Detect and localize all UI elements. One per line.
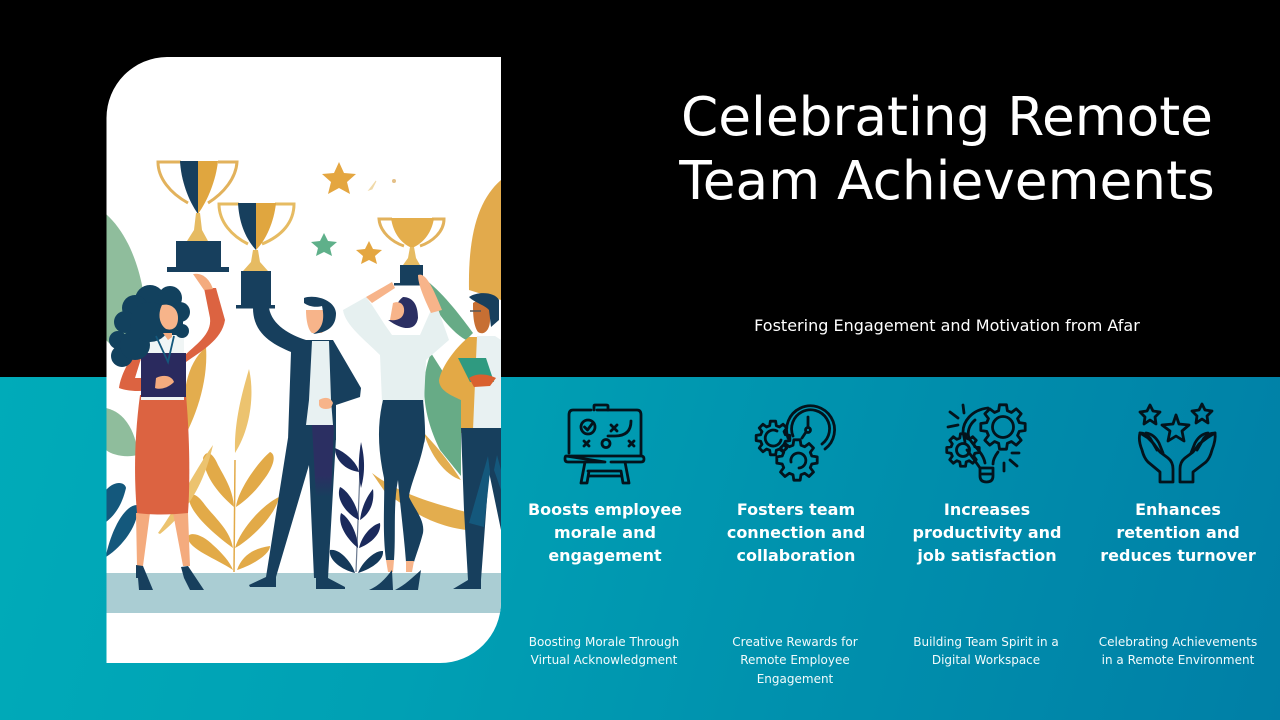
heading: team connection: collaboration bbox=[737, 546, 855, 565]
icon: bulb with gears bbox=[945, 403, 1027, 484]
description: team spirit: Building Team Spirit in a bbox=[913, 635, 1059, 649]
navy plant bbox=[330, 442, 383, 573]
title bbox=[679, 86, 1215, 212]
man in yellow jacket bbox=[439, 293, 501, 589]
description: virtual acknowledgment: Boosting Morale Through bbox=[529, 635, 679, 649]
stars bbox=[311, 162, 396, 264]
heading: boosts morale: Boosts employee bbox=[528, 500, 682, 519]
man in dark suit bbox=[249, 297, 361, 589]
woman in white top bbox=[343, 275, 449, 590]
background leaves bbox=[106, 180, 501, 557]
trophy 3 bbox=[379, 218, 444, 286]
icon: strategy board bbox=[564, 404, 646, 484]
trophy 2 bbox=[219, 203, 294, 308]
title: Team Achievements bbox=[679, 150, 1215, 212]
heading: productivity: job satisfaction bbox=[917, 546, 1057, 565]
description: team spirit: Digital Workspace bbox=[932, 653, 1040, 667]
illustration panel: team holding trophies bbox=[106, 57, 501, 663]
description: creative rewards: Creative Rewards for bbox=[732, 635, 858, 649]
description: celebrating achievements: in a Remote Environment bbox=[1102, 653, 1254, 667]
woman in red dress bbox=[109, 274, 225, 590]
heading: boosts morale: morale and bbox=[554, 523, 656, 542]
heading: retention: retention and bbox=[1116, 523, 1240, 542]
floor bbox=[106, 573, 502, 613]
yellow plant bbox=[158, 369, 279, 572]
icon: gears and clock bbox=[754, 404, 836, 482]
heading: team connection: connection and bbox=[727, 523, 865, 542]
subtitle: Fostering Engagement and Motivation from Afar bbox=[754, 316, 1140, 335]
heading: boosts morale bbox=[528, 500, 682, 565]
description: creative rewards: Remote Employee bbox=[740, 653, 850, 667]
description: team spirit bbox=[913, 635, 1059, 667]
title: Celebrating Remote bbox=[681, 86, 1213, 148]
heading: retention: Enhances bbox=[1135, 500, 1221, 519]
teal gradient band bbox=[0, 377, 1280, 720]
heading: retention: reduces turnover bbox=[1100, 546, 1256, 565]
description: virtual acknowledgment: Virtual Acknowledgment bbox=[531, 653, 677, 667]
heading: productivity: productivity and bbox=[912, 523, 1062, 542]
trophy 1 bbox=[158, 161, 237, 272]
heading: team connection: Fosters team bbox=[737, 500, 855, 519]
heading: retention bbox=[1100, 500, 1256, 565]
description: virtual acknowledgment bbox=[529, 635, 679, 667]
description: creative rewards: Engagement bbox=[757, 672, 833, 686]
heading: productivity: Increases bbox=[944, 500, 1030, 519]
description: celebrating achievements: Celebrating Achievements bbox=[1099, 635, 1257, 649]
description: creative rewards bbox=[732, 635, 858, 686]
icon: hands and stars bbox=[1138, 402, 1217, 484]
heading: team connection bbox=[727, 500, 865, 565]
description: celebrating achievements bbox=[1099, 635, 1257, 667]
heading: boosts morale: engagement bbox=[548, 546, 662, 565]
heading: productivity bbox=[912, 500, 1062, 565]
